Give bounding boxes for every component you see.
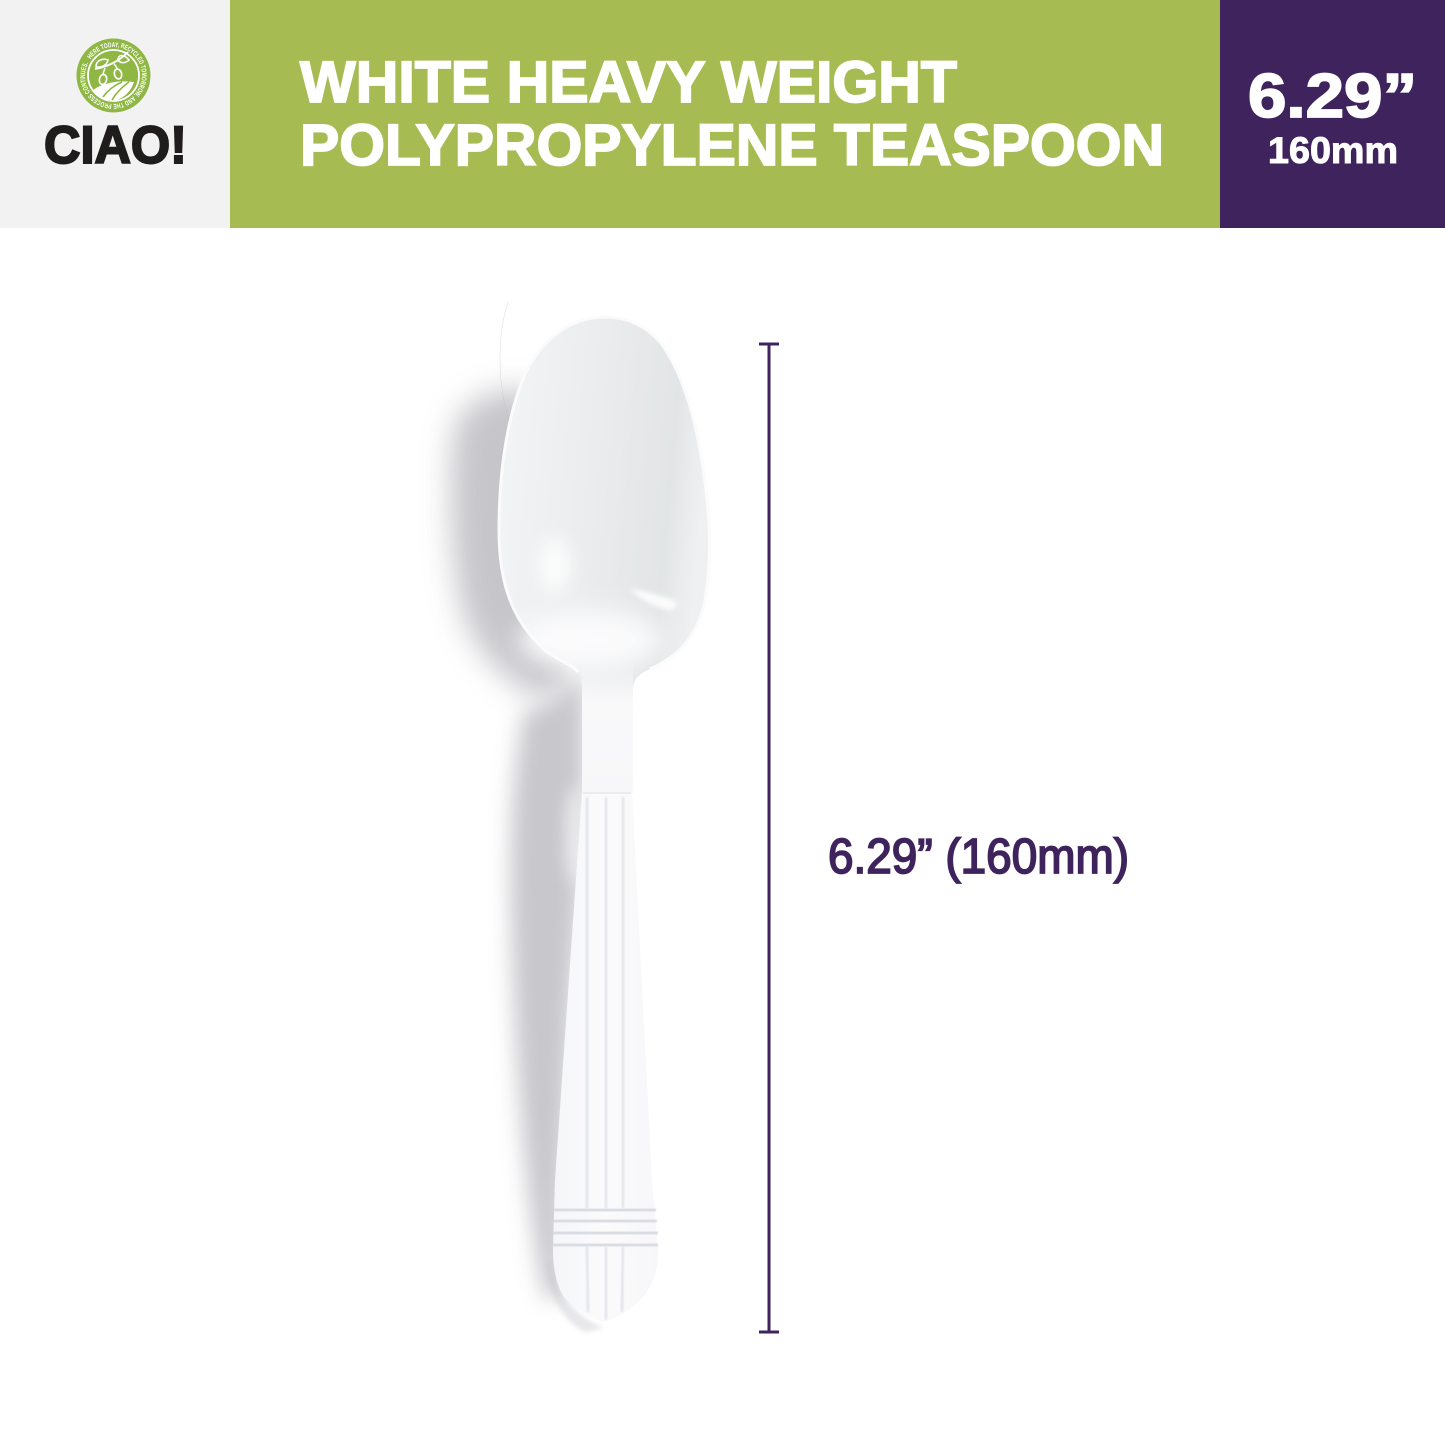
spoon shadow [451,390,604,1332]
header band [0,0,1445,228]
dimension label: 6.29” (160mm) [828,830,1129,884]
neck [582,660,633,794]
title [300,50,1164,178]
lower bowl glow [518,610,662,670]
icon: round olive branch badge: HERE TODAY, RECYCLED TOMORROW, AND THE PROCESS CONTINUES. [80,42,147,109]
dimension bar [759,344,779,1332]
title: WHITE HEAVY WEIGHT [300,50,957,115]
spoon body [499,317,710,1322]
title: POLYPROPYLENE TEASPOON [300,113,1164,178]
spoon bowl [499,317,710,792]
size in millimetres: 160mm [1268,130,1398,171]
spoon photograph [451,302,710,1332]
bowl inner rim highlight [499,317,710,672]
spoon handle [553,792,658,1322]
bowl highlight [539,537,571,593]
handle ridges [587,797,623,1320]
cutout artefact line [500,302,510,424]
brand wordmark: CIAO! [44,116,187,175]
bowl glint [630,589,677,610]
size in inches: 6.29” [1248,62,1417,131]
logo panel [0,0,230,228]
handle shoulder marks [583,792,631,794]
size panel [1220,0,1445,228]
title panel [230,0,1220,228]
handle cross bands [553,1210,658,1245]
